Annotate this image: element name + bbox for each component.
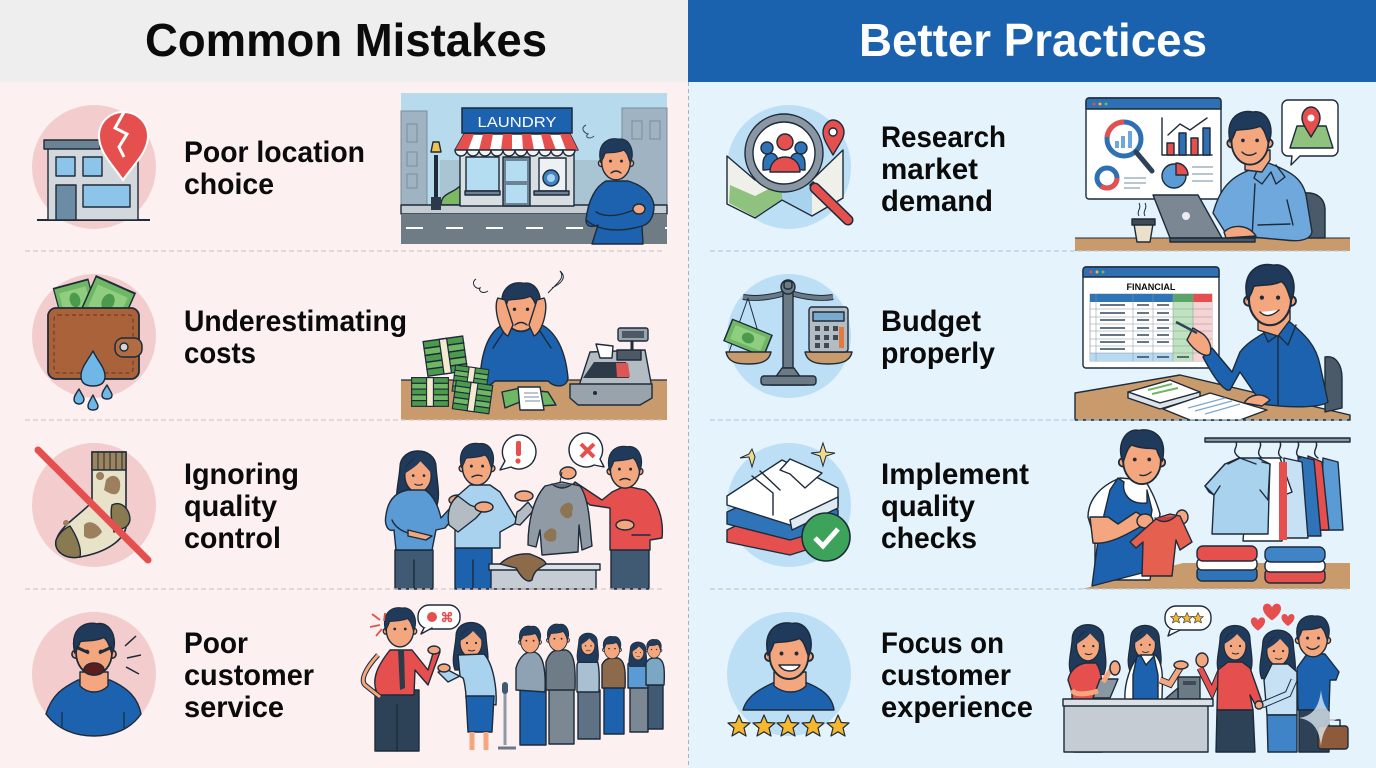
coffee cup <box>1132 203 1155 242</box>
label: ignoring quality control: Ignoring <box>184 458 299 491</box>
row: poor location choice <box>32 93 667 244</box>
label: research market demand <box>881 121 1006 218</box>
label: implement quality checks: checks <box>881 522 977 555</box>
figure: woman in blue <box>438 622 496 750</box>
stained shirt on hanger <box>528 472 592 555</box>
label: poor location choice: Poor location <box>184 136 365 169</box>
label: ignoring quality control: quality <box>184 490 277 523</box>
label: research market demand: demand <box>881 185 993 218</box>
label: underestimating costs <box>184 305 407 370</box>
illustration: happy staff and customers at counter <box>1063 604 1348 752</box>
red shirt <box>1130 514 1192 576</box>
counter <box>1063 699 1213 752</box>
spreadsheet: FINANCIAL <box>1083 267 1219 368</box>
label: budget properly: properly <box>881 337 995 370</box>
label: poor location choice <box>184 136 365 201</box>
heading band: Common Mistakes: Common Mistakes <box>145 14 547 66</box>
laptop <box>1153 195 1256 242</box>
label: implement quality checks <box>881 458 1029 555</box>
illustration: worker checking shirts <box>1082 430 1350 589</box>
row: underestimating costs <box>32 271 667 420</box>
heading band: Better Practices: Better Practices <box>859 14 1207 66</box>
row: budget properly <box>724 265 1350 420</box>
bubble: cross <box>569 433 604 467</box>
register <box>1165 677 1200 699</box>
heading band: Common Mistakes <box>0 0 688 82</box>
illustration: staff arguing over stained shirt <box>385 433 662 589</box>
heading band: Better Practices <box>688 0 1376 82</box>
illustration: empty laundry shop and worried owner <box>401 93 667 244</box>
spreadsheet: FINANCIAL: FINANCIAL <box>1126 282 1176 293</box>
dividers <box>25 251 665 589</box>
label: budget properly: Budget <box>881 305 981 338</box>
illustration: angry man and waiting queue <box>363 605 664 751</box>
icon: map and magnifier <box>727 105 851 229</box>
panel: better practices <box>688 0 1376 768</box>
label: focus on customer experience: Focus on <box>881 627 1004 660</box>
centre divider <box>688 82 690 768</box>
label: research market demand: Research <box>881 121 1006 154</box>
papers on desk <box>1128 380 1270 420</box>
dividers <box>710 251 1350 589</box>
figure: woman in light blue <box>1255 630 1297 752</box>
group: queue of six customers <box>516 624 664 745</box>
stanchion <box>498 682 516 748</box>
icon: building with broken location pin <box>32 105 156 229</box>
five-star rating <box>728 715 849 736</box>
bag <box>1318 720 1348 749</box>
figure: staff with tablet <box>1068 625 1120 752</box>
table with brown cloth <box>489 554 600 589</box>
label: poor customer service: service <box>184 691 284 724</box>
label: ignoring quality control <box>184 458 299 555</box>
icon: balance scale with money and calculator <box>724 274 852 398</box>
label: poor customer service: customer <box>184 659 314 692</box>
label: poor location choice: choice <box>184 168 274 201</box>
icon: folded shirts with check <box>727 443 851 567</box>
label: poor customer service: Poor <box>184 627 248 660</box>
hearts <box>1251 604 1294 631</box>
figure: man in blue <box>1295 616 1339 752</box>
figure: analyst <box>1213 111 1325 241</box>
label: budget properly <box>881 305 995 370</box>
figure: man pointing <box>1176 265 1342 412</box>
folded piles <box>1197 546 1325 583</box>
label: underestimating costs: costs <box>184 337 256 370</box>
label: underestimating costs: Underestimating <box>184 305 407 338</box>
bubble: exclamation <box>500 435 536 470</box>
label: ignoring quality control: control <box>184 522 281 555</box>
label: research market demand: market <box>881 153 978 186</box>
row: implement quality checks <box>727 430 1350 589</box>
clothes rail <box>1205 438 1350 541</box>
label: poor customer service <box>184 627 314 724</box>
figure: angry man in red <box>363 608 440 751</box>
bubble: swearing: ⌘ <box>440 610 454 625</box>
bubble: three stars <box>1165 606 1211 636</box>
label: focus on customer experience <box>881 627 1033 724</box>
label: implement quality checks: quality <box>881 490 975 523</box>
label: focus on customer experience: experience <box>881 691 1033 724</box>
label: focus on customer experience: customer <box>881 659 1011 692</box>
illustration: analyst with dashboard <box>1075 98 1350 251</box>
illustration: empty laundry shop and worried owner: LAUNDRY <box>478 114 556 131</box>
figure: woman pointing <box>385 451 467 589</box>
figure: clerk in apron <box>1125 625 1188 700</box>
row: ignoring quality control <box>32 433 662 589</box>
panel: common mistakes <box>0 0 688 768</box>
figure: man in light blue <box>448 443 534 589</box>
figure: man in red holding hanger <box>560 446 662 589</box>
figure: worker in apron <box>1088 430 1188 586</box>
row: poor customer service <box>32 605 664 751</box>
sparkle watermark <box>1299 690 1342 746</box>
row: research market demand <box>727 98 1350 251</box>
label: implement quality checks: Implement <box>881 458 1029 491</box>
icon: angry customer <box>32 612 156 736</box>
figure: woman in red <box>1196 626 1262 752</box>
icon: happy customer with stars <box>727 612 851 736</box>
illustration: stressed owner with cash and register <box>401 271 667 420</box>
icon: stained sock crossed out <box>32 443 156 567</box>
bubble: map pin <box>1282 100 1338 165</box>
row: focus on customer experience <box>727 604 1348 752</box>
bubble: swearing <box>418 605 460 634</box>
illustration: man with financial spreadsheet <box>1075 265 1350 420</box>
screen: analytics dashboard <box>1086 98 1221 199</box>
icon: leaking wallet <box>32 274 156 410</box>
